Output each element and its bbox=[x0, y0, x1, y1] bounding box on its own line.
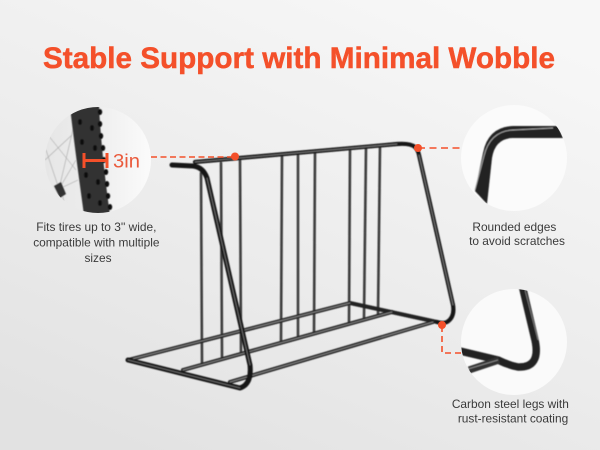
marker dot bbox=[231, 152, 239, 160]
callout: carbon steel legs bbox=[438, 285, 572, 426]
connector line bbox=[418, 147, 461, 149]
caption: Carbon steel legs with bbox=[452, 397, 569, 411]
dimension marker bbox=[84, 153, 107, 168]
caption: sizes bbox=[84, 251, 112, 265]
title: Stable Support with Minimal Wobble bbox=[43, 42, 555, 75]
caption: to avoid scratches bbox=[469, 234, 565, 248]
dimension label: 3in bbox=[113, 150, 140, 172]
callout: rounded edges bbox=[414, 125, 566, 245]
marker dot bbox=[414, 144, 422, 152]
connector line bbox=[151, 156, 235, 158]
marker dot bbox=[438, 321, 446, 329]
circle: tire detail bbox=[45, 105, 151, 215]
circle: rounded tube detail bbox=[461, 125, 566, 211]
bike rack product bbox=[128, 144, 453, 388]
callout: tire width bbox=[33, 105, 239, 265]
caption: rust-resistant coating bbox=[458, 412, 568, 426]
caption: Rounded edges bbox=[472, 220, 556, 234]
caption: Fits tires up to 3'' wide, bbox=[36, 220, 156, 234]
circle: leg detail bbox=[460, 285, 567, 395]
caption: compatible with multiple bbox=[33, 236, 160, 250]
connector line bbox=[442, 326, 462, 353]
